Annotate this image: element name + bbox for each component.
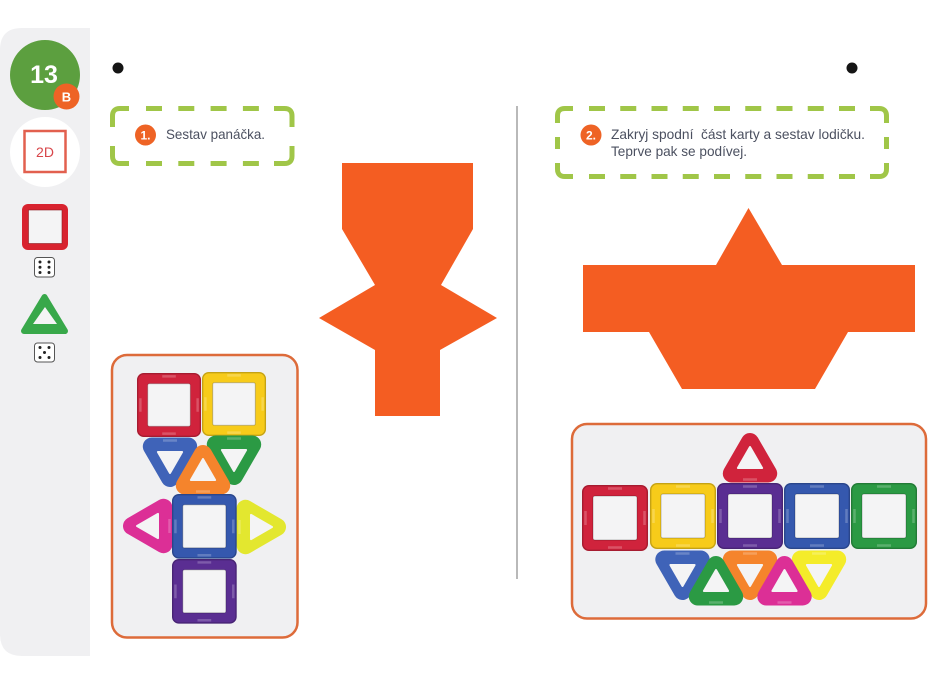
red square — [582, 485, 648, 551]
photo panel: boat solution — [572, 424, 926, 618]
orange triangle — [732, 554, 768, 591]
sidebar — [0, 28, 90, 656]
blue triangle — [152, 440, 188, 478]
instruction 2: Zakryj spodní část karty a sestav lodičku. — [611, 126, 865, 142]
orange boat silhouette — [583, 208, 915, 389]
instruction 2: 2. — [586, 128, 596, 142]
purple square — [172, 559, 237, 624]
red square — [137, 373, 201, 437]
icon: 2D square: 2D — [36, 144, 54, 160]
blue square — [784, 483, 850, 549]
orange triangle — [185, 454, 221, 492]
icon: red square piece — [22, 204, 68, 250]
yellow triangle — [801, 554, 837, 591]
orange figure silhouette — [319, 163, 497, 416]
purple square — [717, 483, 783, 549]
green triangle — [698, 565, 734, 602]
lime triangle — [240, 509, 277, 545]
blue triangle — [664, 554, 701, 591]
icon: green triangle piece — [24, 297, 65, 331]
magenta triangle — [766, 565, 803, 602]
green triangle — [216, 438, 252, 476]
level badge: 13 B: 13 — [30, 61, 58, 89]
instruction 1: 1. — [140, 128, 151, 142]
instruction 2: Teprve pak se podívej. — [611, 143, 747, 159]
level badge: 13 B — [10, 40, 80, 110]
instruction 2 — [558, 108, 886, 176]
hole punch dot right — [846, 62, 858, 74]
icon: 2D square — [10, 117, 80, 187]
blue square — [172, 494, 237, 559]
instruction 1 — [112, 108, 292, 164]
centre divider — [516, 106, 518, 579]
icon: die showing six — [34, 258, 54, 277]
instruction 1: Sestav panáčka. — [166, 126, 265, 142]
yellow square — [202, 372, 266, 436]
yellow square — [650, 483, 716, 549]
icon: die showing five — [34, 343, 54, 362]
green square — [851, 483, 917, 549]
hole punch dot left — [112, 62, 124, 74]
photo panel: figure solution — [112, 355, 298, 638]
magenta triangle — [132, 508, 170, 544]
red triangle — [732, 442, 768, 480]
level badge: 13 B: B — [62, 90, 71, 104]
